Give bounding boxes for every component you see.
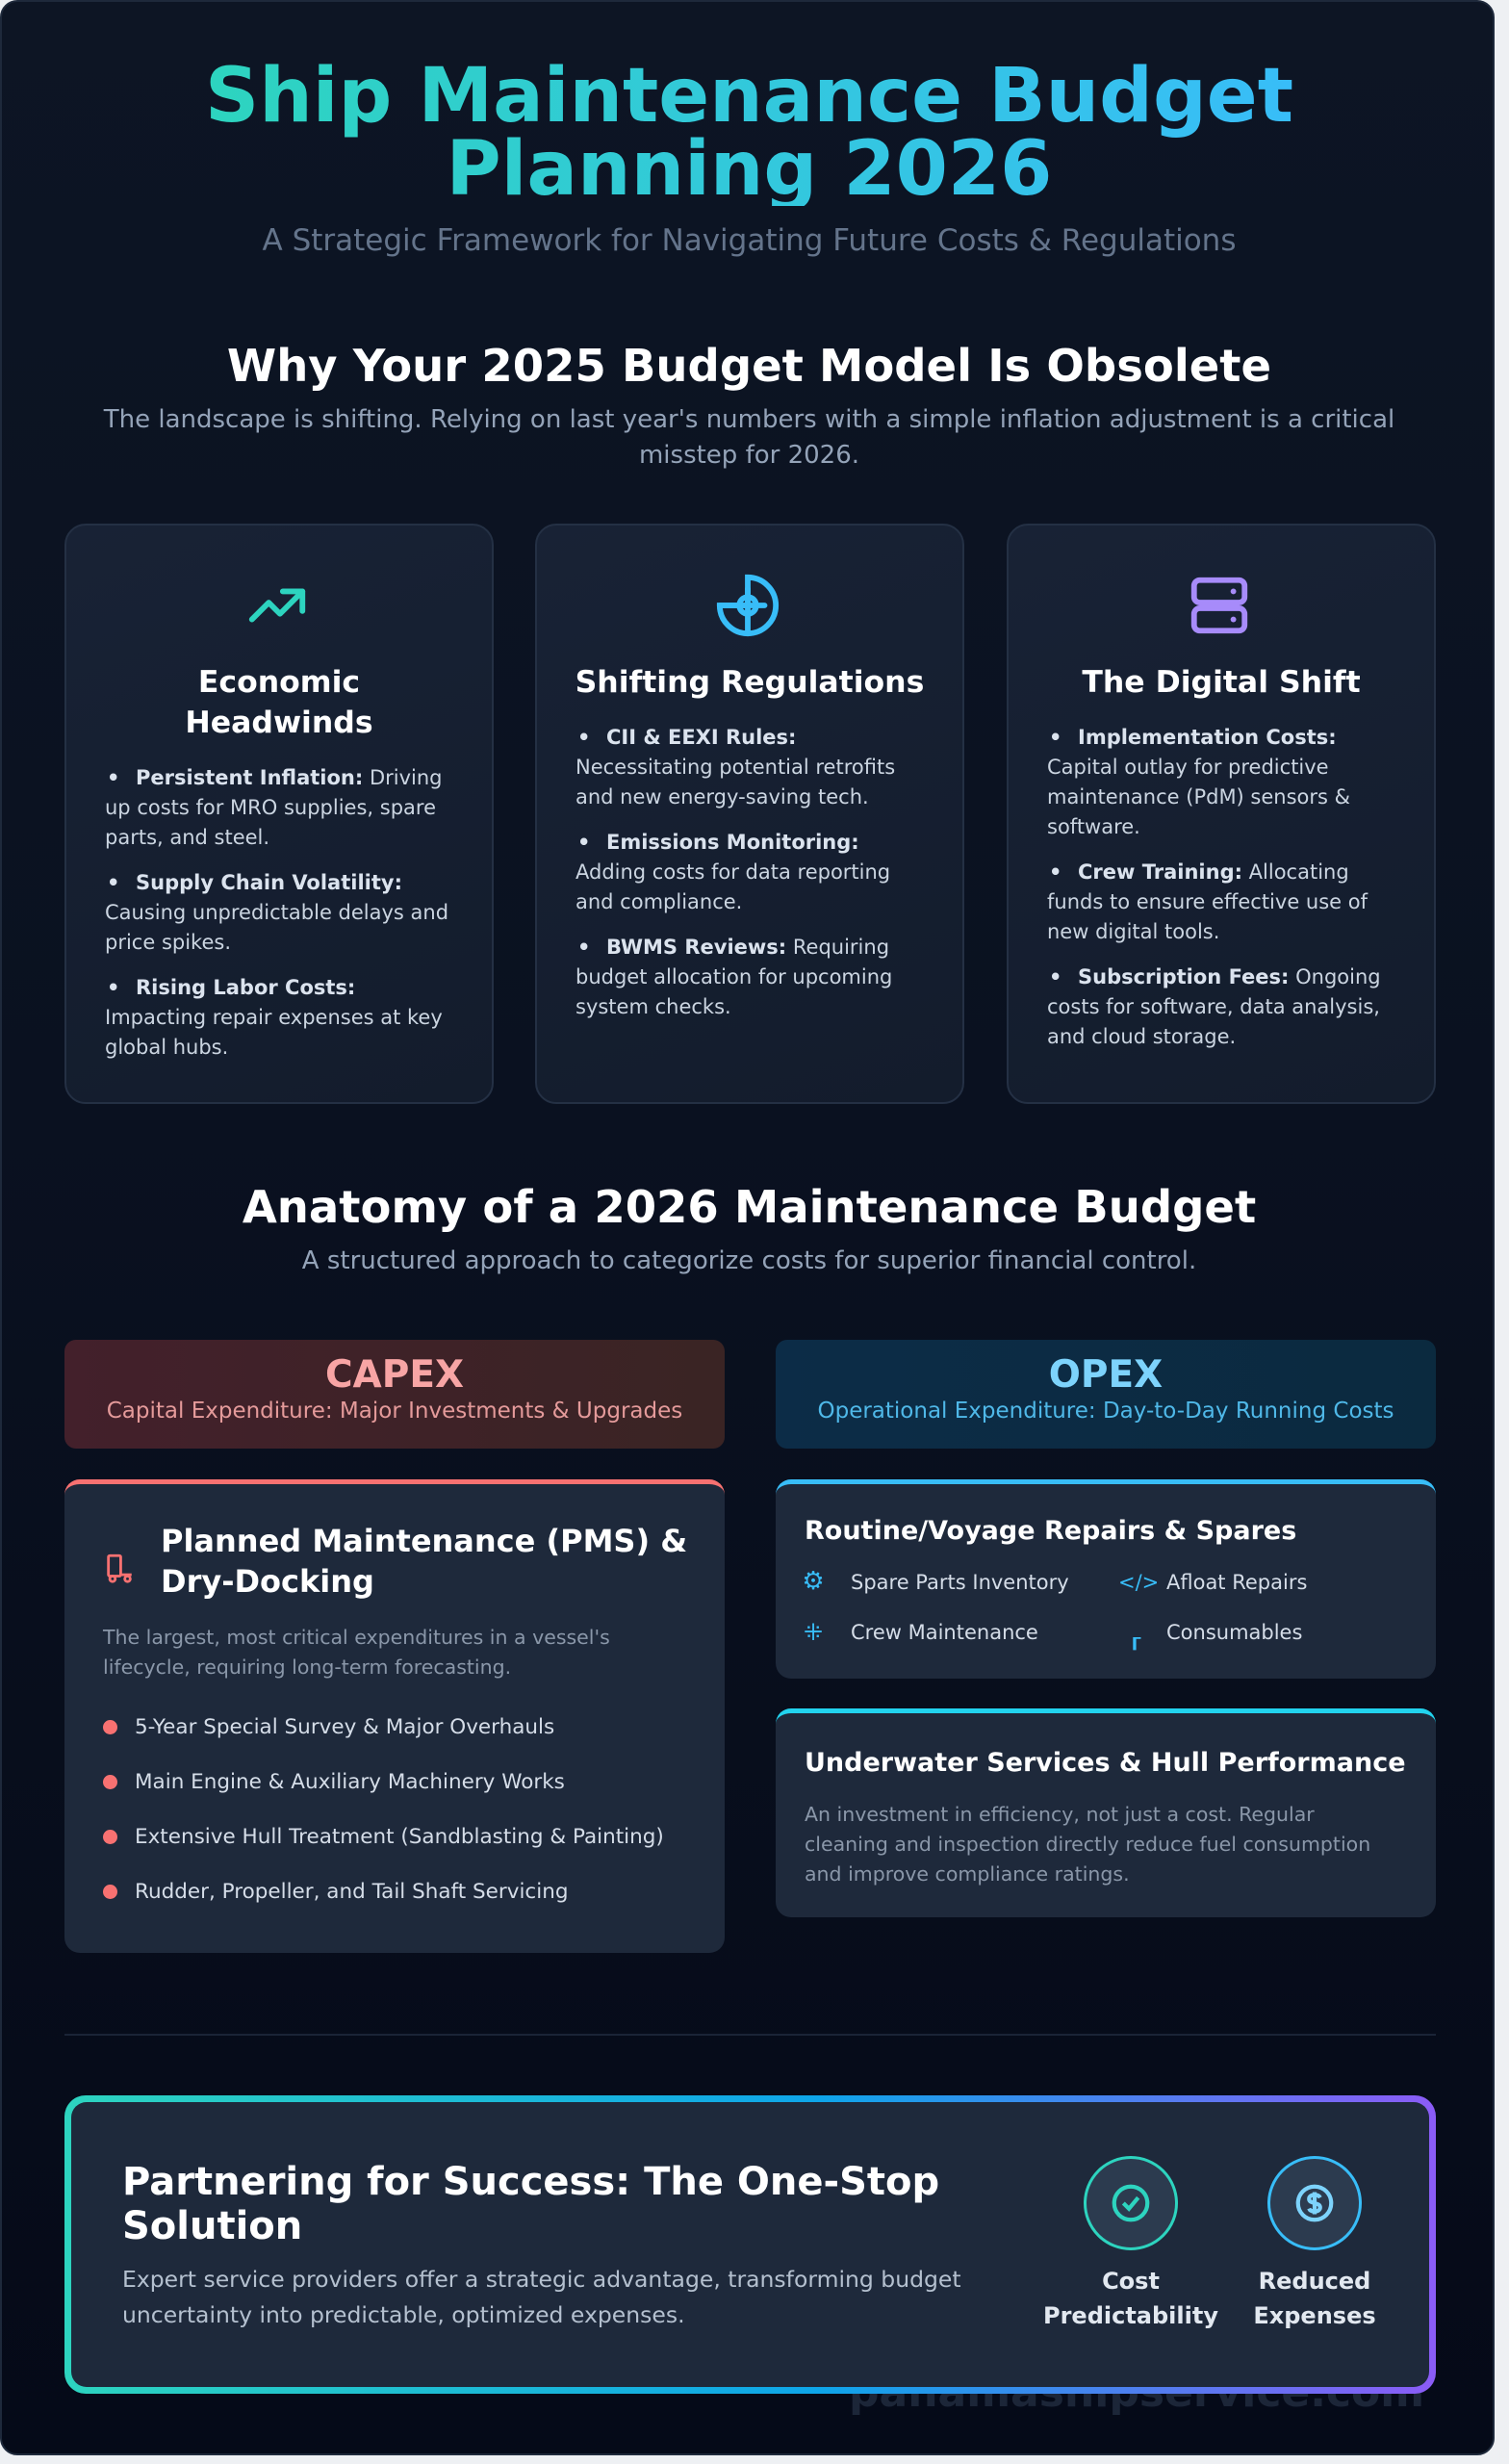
heading: Routine/Voyage Repairs & Spares <box>805 1516 1296 1546</box>
bullet list <box>1047 726 1381 1048</box>
opex header: OPEX <box>1049 1353 1163 1397</box>
bullet list: Supply Chain Volatility: Causing unpredictable delays and price spikes. <box>105 871 448 954</box>
capex header: Capital Expenditure: Major Investments & Upgrades <box>107 1399 682 1424</box>
icon: trend up <box>248 589 306 622</box>
heading: anatomy: Anatomy of a 2026 Maintenance Budget <box>243 1181 1256 1233</box>
capex header: CAPEX <box>325 1353 464 1397</box>
items grid: ┎ <box>1129 1627 1140 1650</box>
anatomy subtitle: A structured approach to categorize costs for superior financial control. <box>302 1246 1196 1275</box>
icon: compass <box>716 574 780 637</box>
panel: shifting regulations <box>535 524 964 1104</box>
panel: underwater services <box>776 1708 1436 1917</box>
items grid: </> <box>1118 1571 1159 1594</box>
bullet list: Crew Training: Allocating funds to ensure effective use of new digital tools. <box>1047 860 1368 943</box>
heading <box>161 1523 687 1600</box>
title: Planning 2026 <box>447 126 1052 213</box>
icon: reduced expenses: Reduced <box>1259 2268 1370 2295</box>
panel: routine repairs <box>776 1479 1436 1679</box>
intro text: The landscape is shifting. Relying on last year's numbers with a simple inflation adjustment is a critical misstep for 2026. <box>104 405 1394 470</box>
description: An investment in efficiency, not just a cost. Regular cleaning and inspection directly reduce fuel consumption and improve compliance ratings. <box>805 1803 1370 1886</box>
bullet list: Necessitating potential retrofits and new energy-saving tech. <box>575 756 895 808</box>
heading <box>185 665 373 740</box>
heading: Headwinds <box>185 706 373 740</box>
bullet list: Persistent Inflation: Driving up costs for MRO supplies, spare parts, and steel. <box>105 766 443 849</box>
items grid: ⚙ <box>802 1567 825 1596</box>
bullet list: Capital outlay for predictive maintenance (PdM) sensors & software. <box>1047 756 1350 838</box>
bullet list: Rising Labor Costs: Impacting repair expenses at key global hubs. <box>105 976 443 1059</box>
bullet list: Emissions Monitoring: <box>606 831 859 854</box>
items grid <box>802 1567 1307 1650</box>
title <box>205 53 1293 213</box>
heading: Solution <box>122 2204 302 2248</box>
list: Main Engine & Auxiliary Machinery Works <box>135 1770 565 1794</box>
heading: The Digital Shift <box>1082 665 1361 700</box>
items grid: Crew Maintenance <box>851 1621 1038 1644</box>
icon: cost predictability <box>1043 2156 1218 2329</box>
watermark: panamashipservice.com <box>849 2368 1424 2417</box>
description: Expert service providers offer a strategic advantage, transforming budget uncertainty into predictable, optimized expenses. <box>122 2266 961 2328</box>
heading: Partnering for Success: The One-Stop <box>122 2160 939 2204</box>
panel: economic headwinds <box>64 524 494 1104</box>
bullet list <box>575 726 895 1018</box>
items grid: Consumables <box>1166 1621 1302 1644</box>
icon: cost predictability: Predictability <box>1043 2302 1218 2329</box>
capex header <box>64 1340 725 1449</box>
opex header: Operational Expenditure: Day-to-Day Running Costs <box>818 1399 1394 1424</box>
bullet list: Adding costs for data reporting and compliance. <box>575 860 890 913</box>
icon: cost predictability: Cost <box>1102 2268 1160 2295</box>
heading: Underwater Services & Hull Performance <box>805 1748 1406 1778</box>
list: Extensive Hull Treatment (Sandblasting & Painting) <box>135 1825 664 1849</box>
list: Rudder, Propeller, and Tail Shaft Servicing <box>135 1880 568 1904</box>
heading: Planned Maintenance (PMS) & <box>161 1523 687 1559</box>
icon: reduced expenses <box>1253 2156 1376 2329</box>
description: The largest, most critical expenditures in a vessel's lifecycle, requiring long-term forecasting. <box>103 1626 610 1679</box>
icon: server <box>1191 578 1247 633</box>
bullet list: Implementation Costs: <box>1078 726 1337 749</box>
bullet list: Subscription Fees: Ongoing costs for software, data analysis, and cloud storage. <box>1047 965 1381 1048</box>
panel: digital shift <box>1007 524 1436 1104</box>
panel: planned maintenance <box>64 1479 725 1953</box>
callout: partnering <box>64 2095 1436 2394</box>
bullet list: BWMS Reviews: Requiring budget allocation for upcoming system checks. <box>575 936 892 1018</box>
icon: reduced expenses: Expenses <box>1253 2302 1376 2329</box>
heading: Dry-Docking <box>161 1563 374 1600</box>
subtitle: A Strategic Framework for Navigating Future Costs & Regulations <box>263 223 1236 258</box>
heading: why obsolete: Why Your 2025 Budget Model Is Obsolete <box>227 340 1271 392</box>
icon: dock <box>107 1553 132 1583</box>
items grid: Afloat Repairs <box>1166 1571 1307 1594</box>
heading <box>122 2160 939 2248</box>
bullet list <box>105 766 448 1059</box>
items grid: Spare Parts Inventory <box>851 1571 1069 1594</box>
heading: Economic <box>198 665 360 700</box>
title: Ship Maintenance Budget <box>205 53 1293 140</box>
heading: Shifting Regulations <box>575 665 924 700</box>
list <box>103 1715 664 1904</box>
list: 5-Year Special Survey & Major Overhauls <box>135 1715 554 1739</box>
opex header <box>776 1340 1436 1449</box>
bullet list: CII & EEXI Rules: <box>606 726 796 749</box>
items grid: ⁜ <box>804 1619 823 1646</box>
